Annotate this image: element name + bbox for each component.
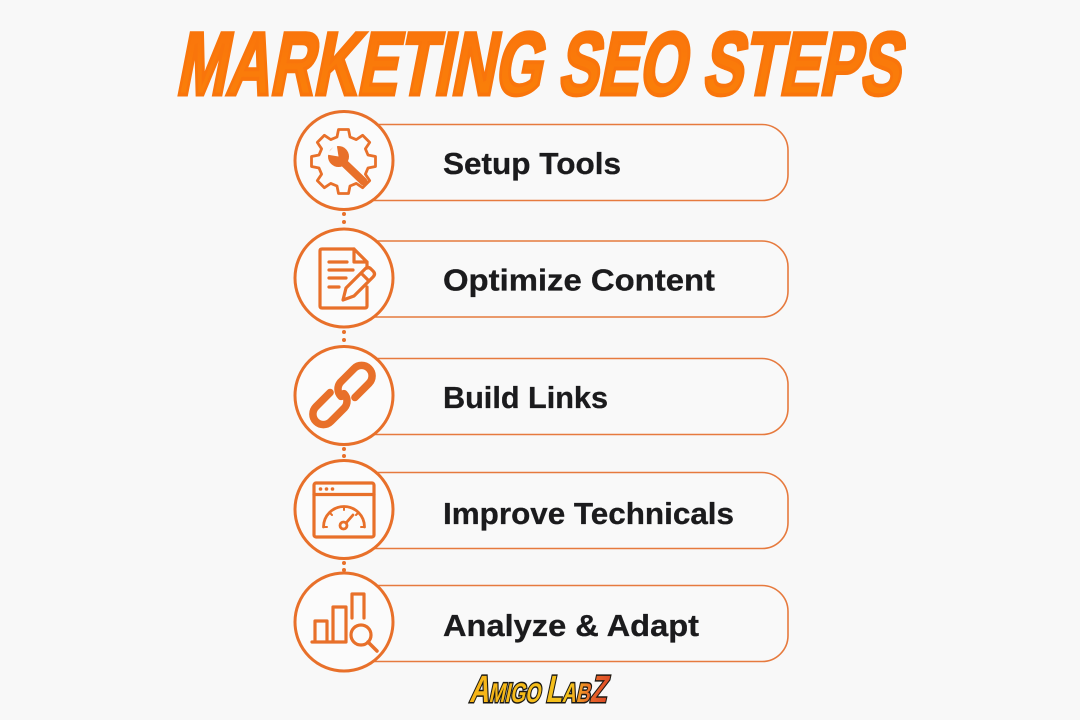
step circle 3 xyxy=(295,346,393,444)
pill: optimize content xyxy=(330,241,788,317)
step 2: optimize content xyxy=(295,229,788,327)
label: analyze and adapt: Analyze & Adapt xyxy=(443,608,699,643)
step circle 4 xyxy=(295,460,393,558)
connector dots xyxy=(342,212,346,572)
step 1: setup tools xyxy=(295,112,788,210)
step 3: build links xyxy=(295,346,788,444)
logo: Amigo Labz: AMIGO LABZ xyxy=(467,668,613,711)
step 5: analyze and adapt xyxy=(295,573,788,671)
step 4: improve technicals xyxy=(295,460,788,558)
label: setup tools: Setup Tools xyxy=(443,146,621,181)
label: optimize content: Optimize Content xyxy=(443,262,715,298)
icon: bar chart and magnifier xyxy=(312,594,377,651)
label: build links: Build Links xyxy=(443,380,608,415)
pill: analyze and adapt xyxy=(330,586,788,662)
step circle 2 xyxy=(295,229,393,327)
label: improve technicals: Improve Technicals xyxy=(443,496,734,531)
pill: setup tools xyxy=(330,124,788,200)
icon: document and pencil xyxy=(320,249,374,308)
pill: build links xyxy=(330,358,788,434)
icon: chain links xyxy=(309,361,376,429)
pill: improve technicals xyxy=(330,472,788,548)
icon: gear and wrench xyxy=(312,130,376,194)
step circle 5 xyxy=(295,573,393,671)
icon: browser speedometer xyxy=(314,483,374,537)
step circle 1 xyxy=(295,112,393,210)
